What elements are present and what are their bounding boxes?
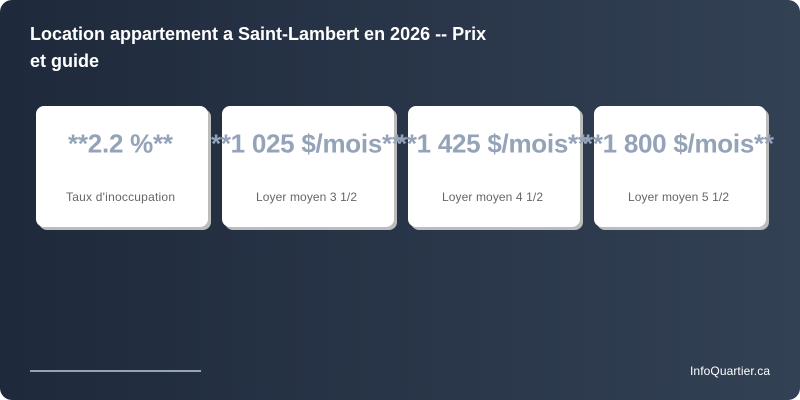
panel: loyer 3 1/2	[222, 106, 397, 230]
value: 1 025 $/mois: **1 025 $/mois**	[211, 128, 403, 158]
title: et guide	[30, 51, 99, 71]
panel: loyer 5 1/2	[594, 106, 769, 230]
panel: loyer 5 1/2: Loyer moyen 5 1/2	[628, 190, 729, 204]
panel: loyer 3 1/2: Loyer moyen 3 1/2	[256, 190, 357, 204]
footer rule	[30, 370, 201, 372]
panel: taux d'inoccupation	[36, 106, 211, 230]
panel: loyer 4 1/2: Loyer moyen 4 1/2	[442, 190, 543, 204]
panel: loyer 4 1/2	[408, 106, 583, 230]
footer brand: InfoQuartier.ca	[690, 364, 770, 378]
title: Location appartement a Saint-Lambert en 2026 -- Prix	[30, 24, 486, 44]
value: 1 425 $/mois: **1 425 $/mois**	[397, 128, 589, 158]
title	[30, 24, 486, 71]
panel: taux d'inoccupation: Taux d'inoccupation	[66, 190, 175, 204]
value: 2.2 %: **2.2 %**	[68, 128, 174, 158]
value: 1 800 $/mois: **1 800 $/mois**	[583, 128, 775, 158]
